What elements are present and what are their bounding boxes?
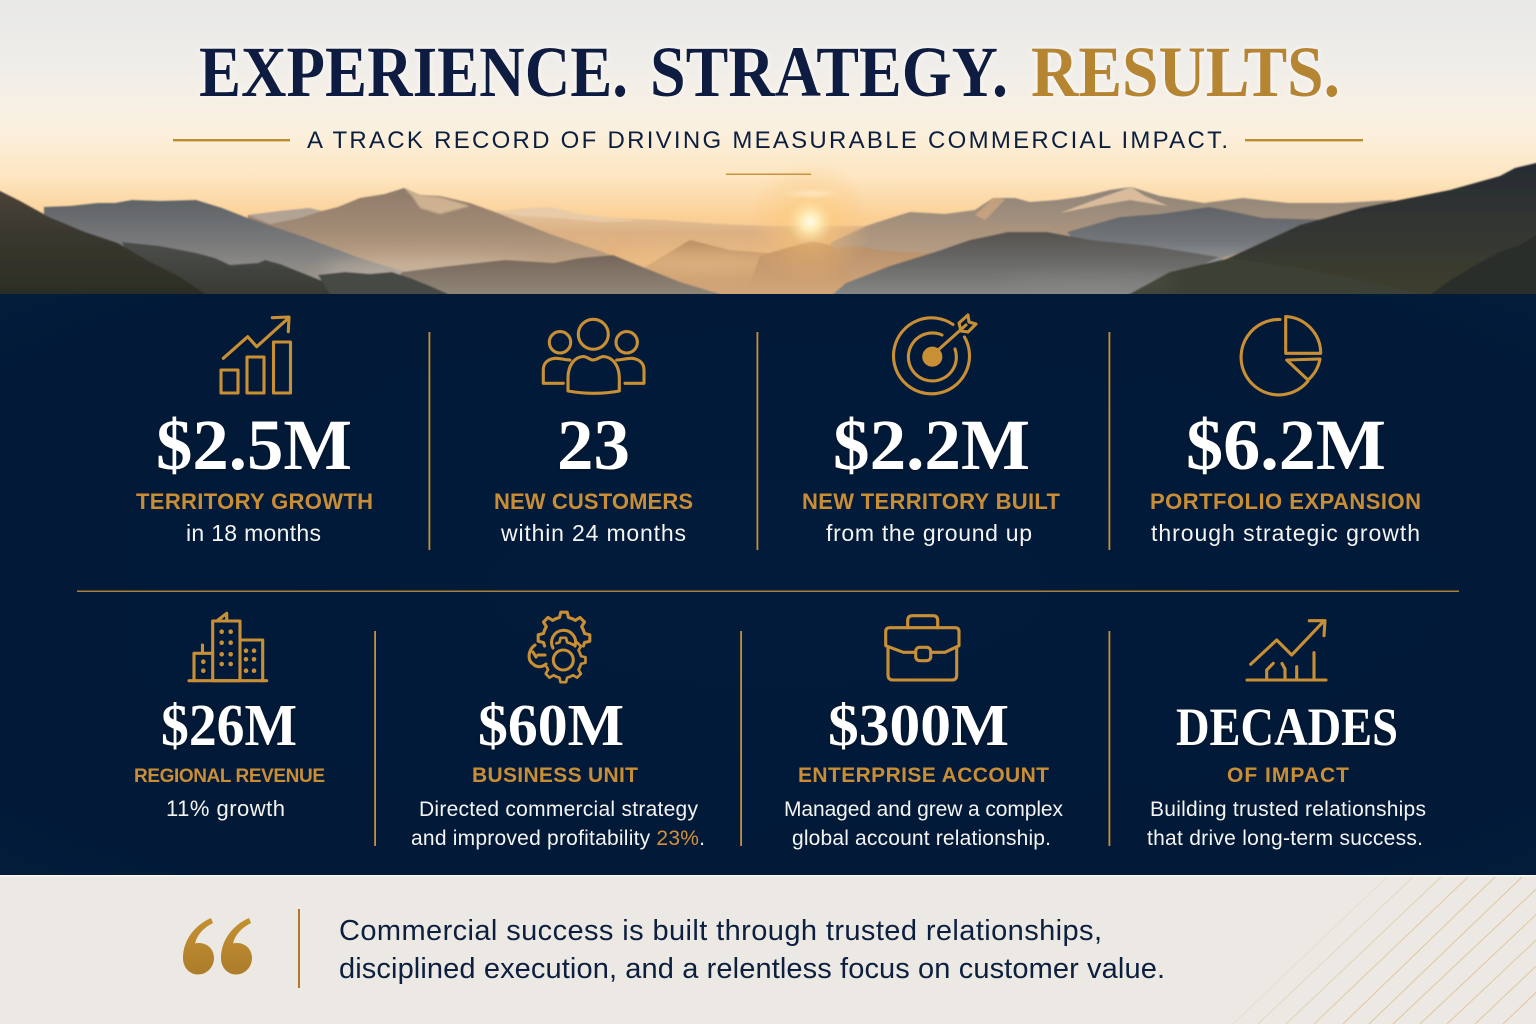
icon: target: [893, 315, 976, 394]
icon: growth arrow over bars: [1247, 621, 1326, 680]
metric: new customers: NEW CUSTOMERS: [494, 489, 693, 514]
metric: regional revenue: REGIONAL REVENUE: [134, 766, 325, 787]
divider: [428, 332, 430, 550]
quote text: Commercial success is built through trusted relationships,: [339, 915, 1102, 947]
metric: new customers: [494, 319, 693, 546]
title: RESULTS.: [1031, 32, 1340, 112]
metric: decades of impact: that drive long-term success.: [1147, 827, 1423, 850]
metric: portfolio expansion: through strategic growth: [1151, 520, 1420, 546]
metric: regional revenue: 11% growth: [166, 796, 285, 821]
icon: quotation mark: [183, 918, 252, 974]
metric: enterprise account: $300M: [828, 692, 1009, 758]
panel: metrics: [0, 294, 1536, 876]
divider: [1108, 332, 1110, 550]
metric: business unit: Directed commercial strategy: [419, 798, 698, 821]
icon: growth bars: [221, 317, 290, 393]
metric: decades of impact: [1147, 621, 1426, 850]
icon: people: [543, 319, 644, 393]
metric: business unit: [411, 612, 705, 850]
subtitle: A TRACK RECORD OF DRIVING MEASURABLE COMMERCIAL IMPACT.: [307, 127, 1228, 154]
metric: new territory built: [802, 315, 1061, 546]
title: EXPERIENCE.: [199, 32, 628, 112]
divider: [756, 332, 758, 550]
metric: decades of impact: Building trusted relationships: [1150, 798, 1426, 821]
icon: briefcase: [886, 616, 959, 680]
metric: enterprise account: [784, 616, 1064, 850]
icon: gears: [529, 612, 590, 682]
metric: territory growth: $2.5M: [156, 405, 352, 485]
metric: portfolio expansion: $6.2M: [1186, 405, 1386, 485]
metric: new territory built: NEW TERRITORY BUILT: [802, 489, 1061, 514]
metric: portfolio expansion: PORTFOLIO EXPANSION: [1150, 489, 1421, 514]
metric: new territory built: from the ground up: [826, 520, 1032, 546]
metric: enterprise account: Managed and grew a complex: [784, 798, 1064, 821]
metric: territory growth: in 18 months: [186, 520, 321, 546]
icon: pie chart: [1241, 316, 1321, 395]
metric: decades of impact: OF IMPACT: [1227, 764, 1349, 787]
quote text: disciplined execution, and a relentless focus on customer value.: [339, 953, 1165, 985]
divider: [740, 631, 742, 846]
metric: portfolio expansion: [1150, 316, 1421, 546]
metric: territory growth: TERRITORY GROWTH: [136, 489, 373, 514]
divider: [374, 631, 376, 846]
metric: new territory built: $2.2M: [833, 405, 1030, 485]
metric: regional revenue: [134, 613, 325, 821]
title: [199, 32, 1340, 112]
metric: enterprise account: ENTERPRISE ACCOUNT: [798, 764, 1049, 787]
metric: territory growth: [136, 317, 373, 546]
icon: buildings: [189, 613, 267, 681]
title: STRATEGY.: [650, 32, 1008, 112]
metric: new customers: within 24 months: [500, 520, 686, 546]
quote text: [339, 915, 1165, 985]
metric: new customers: 23: [557, 405, 630, 485]
metric: decades of impact: DECADES: [1176, 697, 1398, 757]
metric: business unit: BUSINESS UNIT: [472, 764, 638, 787]
metric: business unit: and improved profitability 23%.: [411, 827, 705, 850]
metric: enterprise account: global account relationship.: [792, 827, 1051, 850]
panel: quote band: [0, 875, 1536, 1024]
metric: regional revenue: $26M: [161, 692, 297, 758]
divider: [1108, 631, 1110, 846]
metric: business unit: $60M: [478, 692, 624, 758]
panel: sunrise mountain header: [0, 0, 1536, 310]
